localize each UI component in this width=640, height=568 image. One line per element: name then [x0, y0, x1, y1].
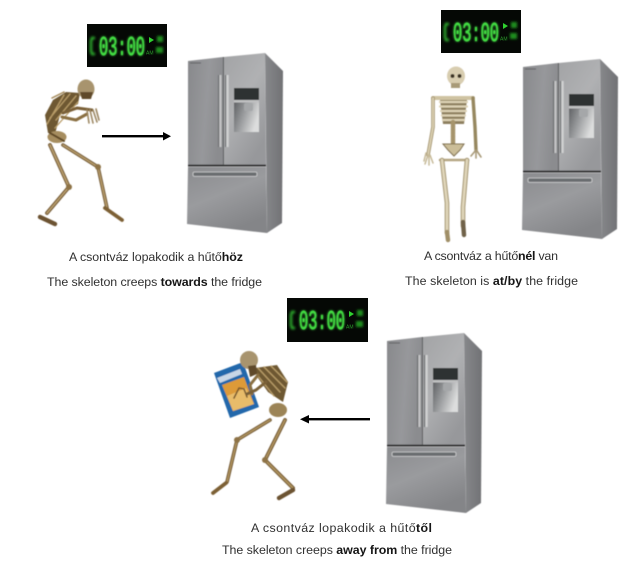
caption: English: The skeleton creeps away from the fridge: [222, 543, 452, 557]
icon: fridge: [522, 59, 618, 239]
digital clock: [87, 24, 167, 67]
scene: skeleton creeps away from the fridge: [213, 298, 482, 557]
arrow towards fridge: [102, 132, 171, 140]
caption: Hungarian: A csontváz a hűtőnél van: [424, 249, 558, 263]
digital clock: 03:00: [299, 308, 345, 338]
scene: skeleton creeps towards the fridge: [40, 24, 283, 289]
digital clock: AM: [146, 50, 154, 56]
digital clock: 03:00: [99, 34, 145, 64]
scene: skeleton is at the fridge: [405, 10, 618, 288]
arrow away from fridge: [300, 415, 370, 424]
icon: cheese bag: [214, 362, 259, 418]
icon: hunched skeleton: [40, 80, 122, 224]
digital clock: AM: [346, 324, 354, 330]
digital clock: 03:00: [99, 34, 145, 64]
digital clock: [287, 298, 368, 342]
digital clock: 03:00: [299, 308, 345, 338]
icon: hunched skeleton carrying cheese: [213, 351, 293, 498]
caption: English: The skeleton is at/by the fridge: [405, 274, 578, 288]
digital clock: 03:00: [453, 20, 499, 50]
caption: English: The skeleton creeps towards the fridge: [47, 275, 262, 289]
digital clock: [441, 10, 521, 53]
caption: Hungarian: A csontváz lopakodik a hűtőhöz: [69, 250, 243, 264]
digital clock: 03:00: [453, 20, 499, 50]
icon: fridge: [386, 333, 482, 513]
icon: fridge: [187, 53, 283, 233]
caption: Hungarian: A csontváz lopakodik a hűtőtől: [251, 521, 432, 535]
icon: standing skeleton: [424, 66, 481, 240]
digital clock: AM: [500, 36, 508, 42]
